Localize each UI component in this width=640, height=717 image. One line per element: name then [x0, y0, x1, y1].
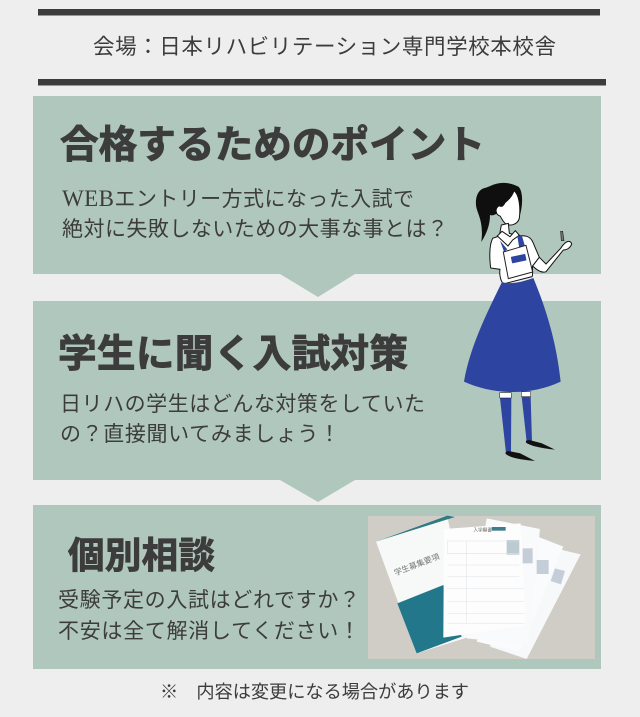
heading: student advice: 学生に聞く入試対策	[58, 333, 408, 376]
body: individual consultation: 不安は全て解消してください！	[58, 620, 360, 643]
body: passing points	[62, 186, 448, 241]
body: student advice: 日リハの学生はどんな対策をしていた	[60, 393, 425, 416]
panel: passing points	[33, 96, 601, 297]
skirt	[464, 278, 561, 392]
venue text: 会場：日本リハビリテーション専門学校本校舎	[93, 35, 556, 59]
pen	[561, 231, 564, 241]
blouse and collar	[490, 223, 539, 284]
heading: passing points: 合格するためのポイント	[60, 124, 485, 167]
body: student advice	[60, 393, 425, 446]
photo: application documents	[368, 516, 595, 659]
face	[496, 191, 520, 225]
application sheets	[443, 518, 581, 659]
body: passing points: WEBエントリー方式になった入試で	[62, 186, 414, 211]
collar	[497, 231, 519, 246]
apron straps	[500, 236, 525, 252]
panel: student advice	[33, 301, 601, 502]
notebook	[503, 245, 533, 279]
body: individual consultation: 受験予定の入試はどれですか？	[58, 589, 360, 612]
lower rule	[38, 79, 606, 86]
shoes	[506, 440, 555, 461]
figure: student	[464, 183, 572, 461]
brochure	[376, 516, 470, 653]
application sheets: 入学願書	[473, 527, 492, 534]
raised arm	[533, 241, 572, 272]
heading: individual consultation: 個別相談	[68, 535, 215, 576]
body: student advice: の？直接聞いてみましょう！	[60, 423, 340, 446]
panel: individual consultation	[33, 505, 601, 669]
legs	[500, 397, 532, 453]
footnote: ※ 内容は変更になる場合があります	[160, 682, 469, 702]
body: passing points: 絶対に失敗しないための大事な事とは？	[62, 218, 448, 241]
body: individual consultation	[58, 589, 360, 643]
ponytail and hair	[476, 183, 522, 242]
brochure: 学生募集要項	[392, 551, 441, 578]
top rule	[38, 9, 600, 16]
